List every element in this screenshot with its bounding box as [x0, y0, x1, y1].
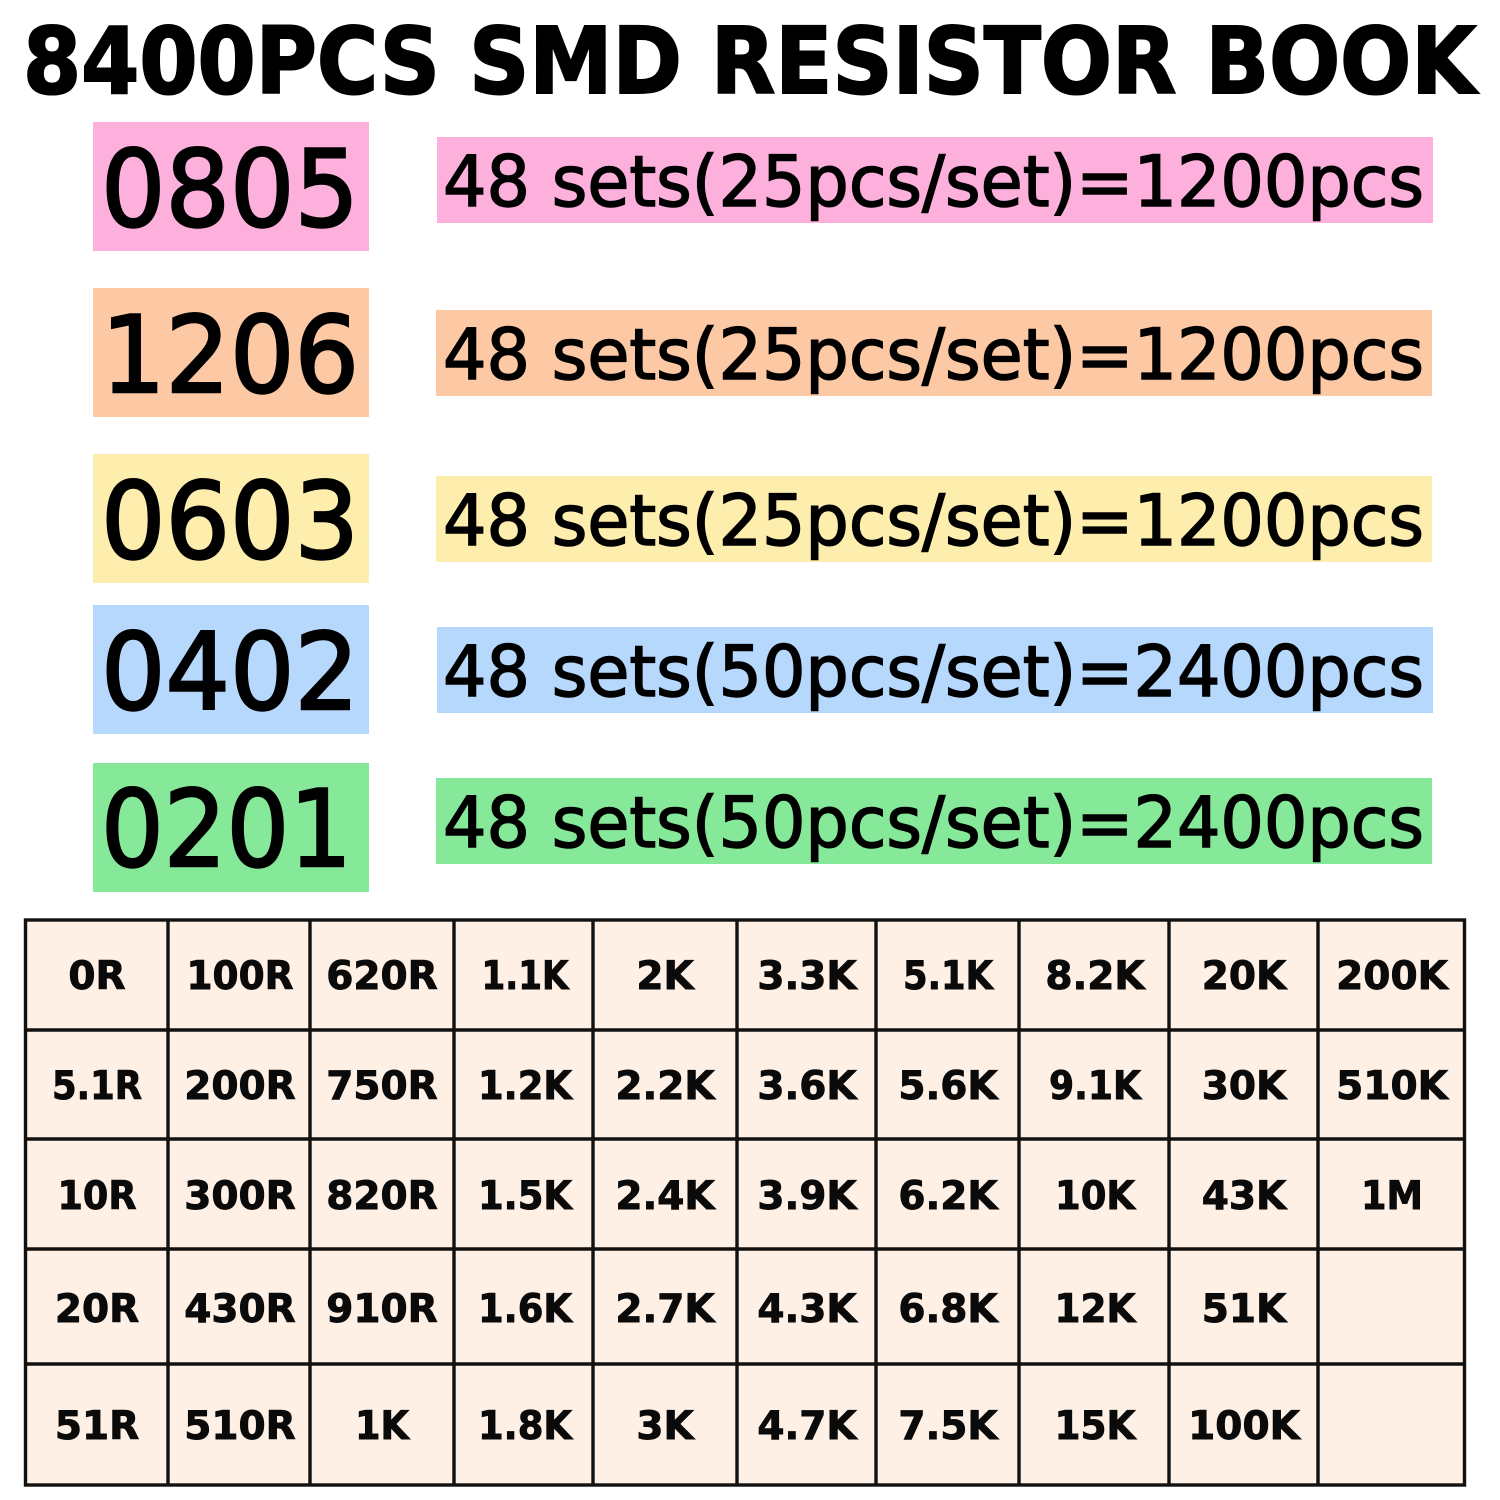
- table row 1: 5.1K: [903, 954, 995, 999]
- table row 4: 51K: [1202, 1287, 1288, 1332]
- panel: size 1206 row: 48 sets(25pcs/set)=1200pcs: [443, 314, 1424, 396]
- table row 5: [55, 1404, 1302, 1449]
- table row 3: 2.4K: [615, 1174, 716, 1219]
- table: resistor values: [25, 920, 1464, 1485]
- table row 5: 100K: [1188, 1404, 1302, 1449]
- table row 5: 1.8K: [478, 1404, 574, 1449]
- panel: size 0603 row: 0603: [101, 460, 359, 583]
- table row 2: 2.2K: [615, 1064, 716, 1109]
- panel: size 0805 row: 0805: [101, 128, 359, 251]
- panel: size 0402 row: [93, 605, 1433, 734]
- table row 4: 1.6K: [478, 1287, 574, 1332]
- table row 1: 620R: [326, 954, 438, 999]
- table row 3: 1M: [1361, 1174, 1423, 1219]
- panel: size 0201 row: [93, 763, 1432, 892]
- table row 4: 12K: [1054, 1287, 1137, 1332]
- table row 3: 3.9K: [757, 1174, 858, 1219]
- table row 1: 200K: [1336, 954, 1450, 999]
- table row 5: 510R: [184, 1404, 296, 1449]
- table row 2: 510K: [1336, 1064, 1450, 1109]
- table row 2: 5.6K: [898, 1064, 999, 1109]
- table row 5: 4.7K: [757, 1404, 858, 1449]
- table row 4: 2.7K: [615, 1287, 716, 1332]
- table row 1: 3.3K: [757, 954, 858, 999]
- table row 1: 20K: [1202, 954, 1288, 999]
- panel: size 0805 row: 48 sets(25pcs/set)=1200pcs: [443, 141, 1424, 223]
- table row 2: 200R: [184, 1064, 296, 1109]
- table row 1: 2K: [636, 954, 695, 999]
- panel: size 0402 row: 0402: [101, 611, 359, 734]
- table row 3: 6.2K: [898, 1174, 999, 1219]
- table row 1: 8.2K: [1045, 954, 1146, 999]
- table row 1: 100R: [186, 954, 294, 999]
- table row 1: 1.1K: [482, 954, 570, 999]
- panel: size 0603 row: 48 sets(25pcs/set)=1200pcs: [443, 480, 1424, 562]
- panel: size 0402 row: 48 sets(50pcs/set)=2400pcs: [443, 631, 1424, 713]
- table row 5: 51R: [55, 1404, 139, 1449]
- panel: size 0201 row: 0201: [101, 768, 352, 891]
- table row 4: 910R: [326, 1287, 438, 1332]
- table row 5: 3K: [636, 1404, 695, 1449]
- table row 4: [55, 1287, 1288, 1332]
- table row 1: [68, 954, 1450, 999]
- table row 3: 43K: [1202, 1174, 1288, 1219]
- table row 5: 1K: [355, 1404, 411, 1449]
- table row 2: 5.1R: [52, 1064, 142, 1109]
- table row 3: 10R: [58, 1174, 136, 1219]
- table row 3: 1.5K: [478, 1174, 574, 1219]
- table row 1: 0R: [68, 954, 126, 999]
- panel: size 0603 row: [93, 454, 1432, 583]
- panel: size 0805 row: [93, 122, 1433, 251]
- table row 2: 9.1K: [1049, 1064, 1143, 1109]
- table row 2: 750R: [326, 1064, 438, 1109]
- table row 3: 300R: [184, 1174, 296, 1219]
- table row 4: 20R: [55, 1287, 139, 1332]
- panel: size 0201 row: 48 sets(50pcs/set)=2400pcs: [443, 782, 1424, 864]
- table row 4: 4.3K: [757, 1287, 858, 1332]
- table row 2: 30K: [1202, 1064, 1288, 1109]
- table row 4: 430R: [184, 1287, 296, 1332]
- table row 5: 7.5K: [898, 1404, 999, 1449]
- table row 3: 10K: [1055, 1174, 1137, 1219]
- table row 2: 1.2K: [478, 1064, 574, 1109]
- table row 4: 6.8K: [898, 1287, 999, 1332]
- table row 2: [52, 1064, 1450, 1109]
- panel: size 1206 row: 1206: [101, 294, 359, 417]
- table row 5: 15K: [1054, 1404, 1137, 1449]
- table row 2: 3.6K: [757, 1064, 858, 1109]
- panel: size 1206 row: [93, 288, 1432, 417]
- table row 3: 820R: [326, 1174, 438, 1219]
- table row 3: [58, 1174, 1423, 1219]
